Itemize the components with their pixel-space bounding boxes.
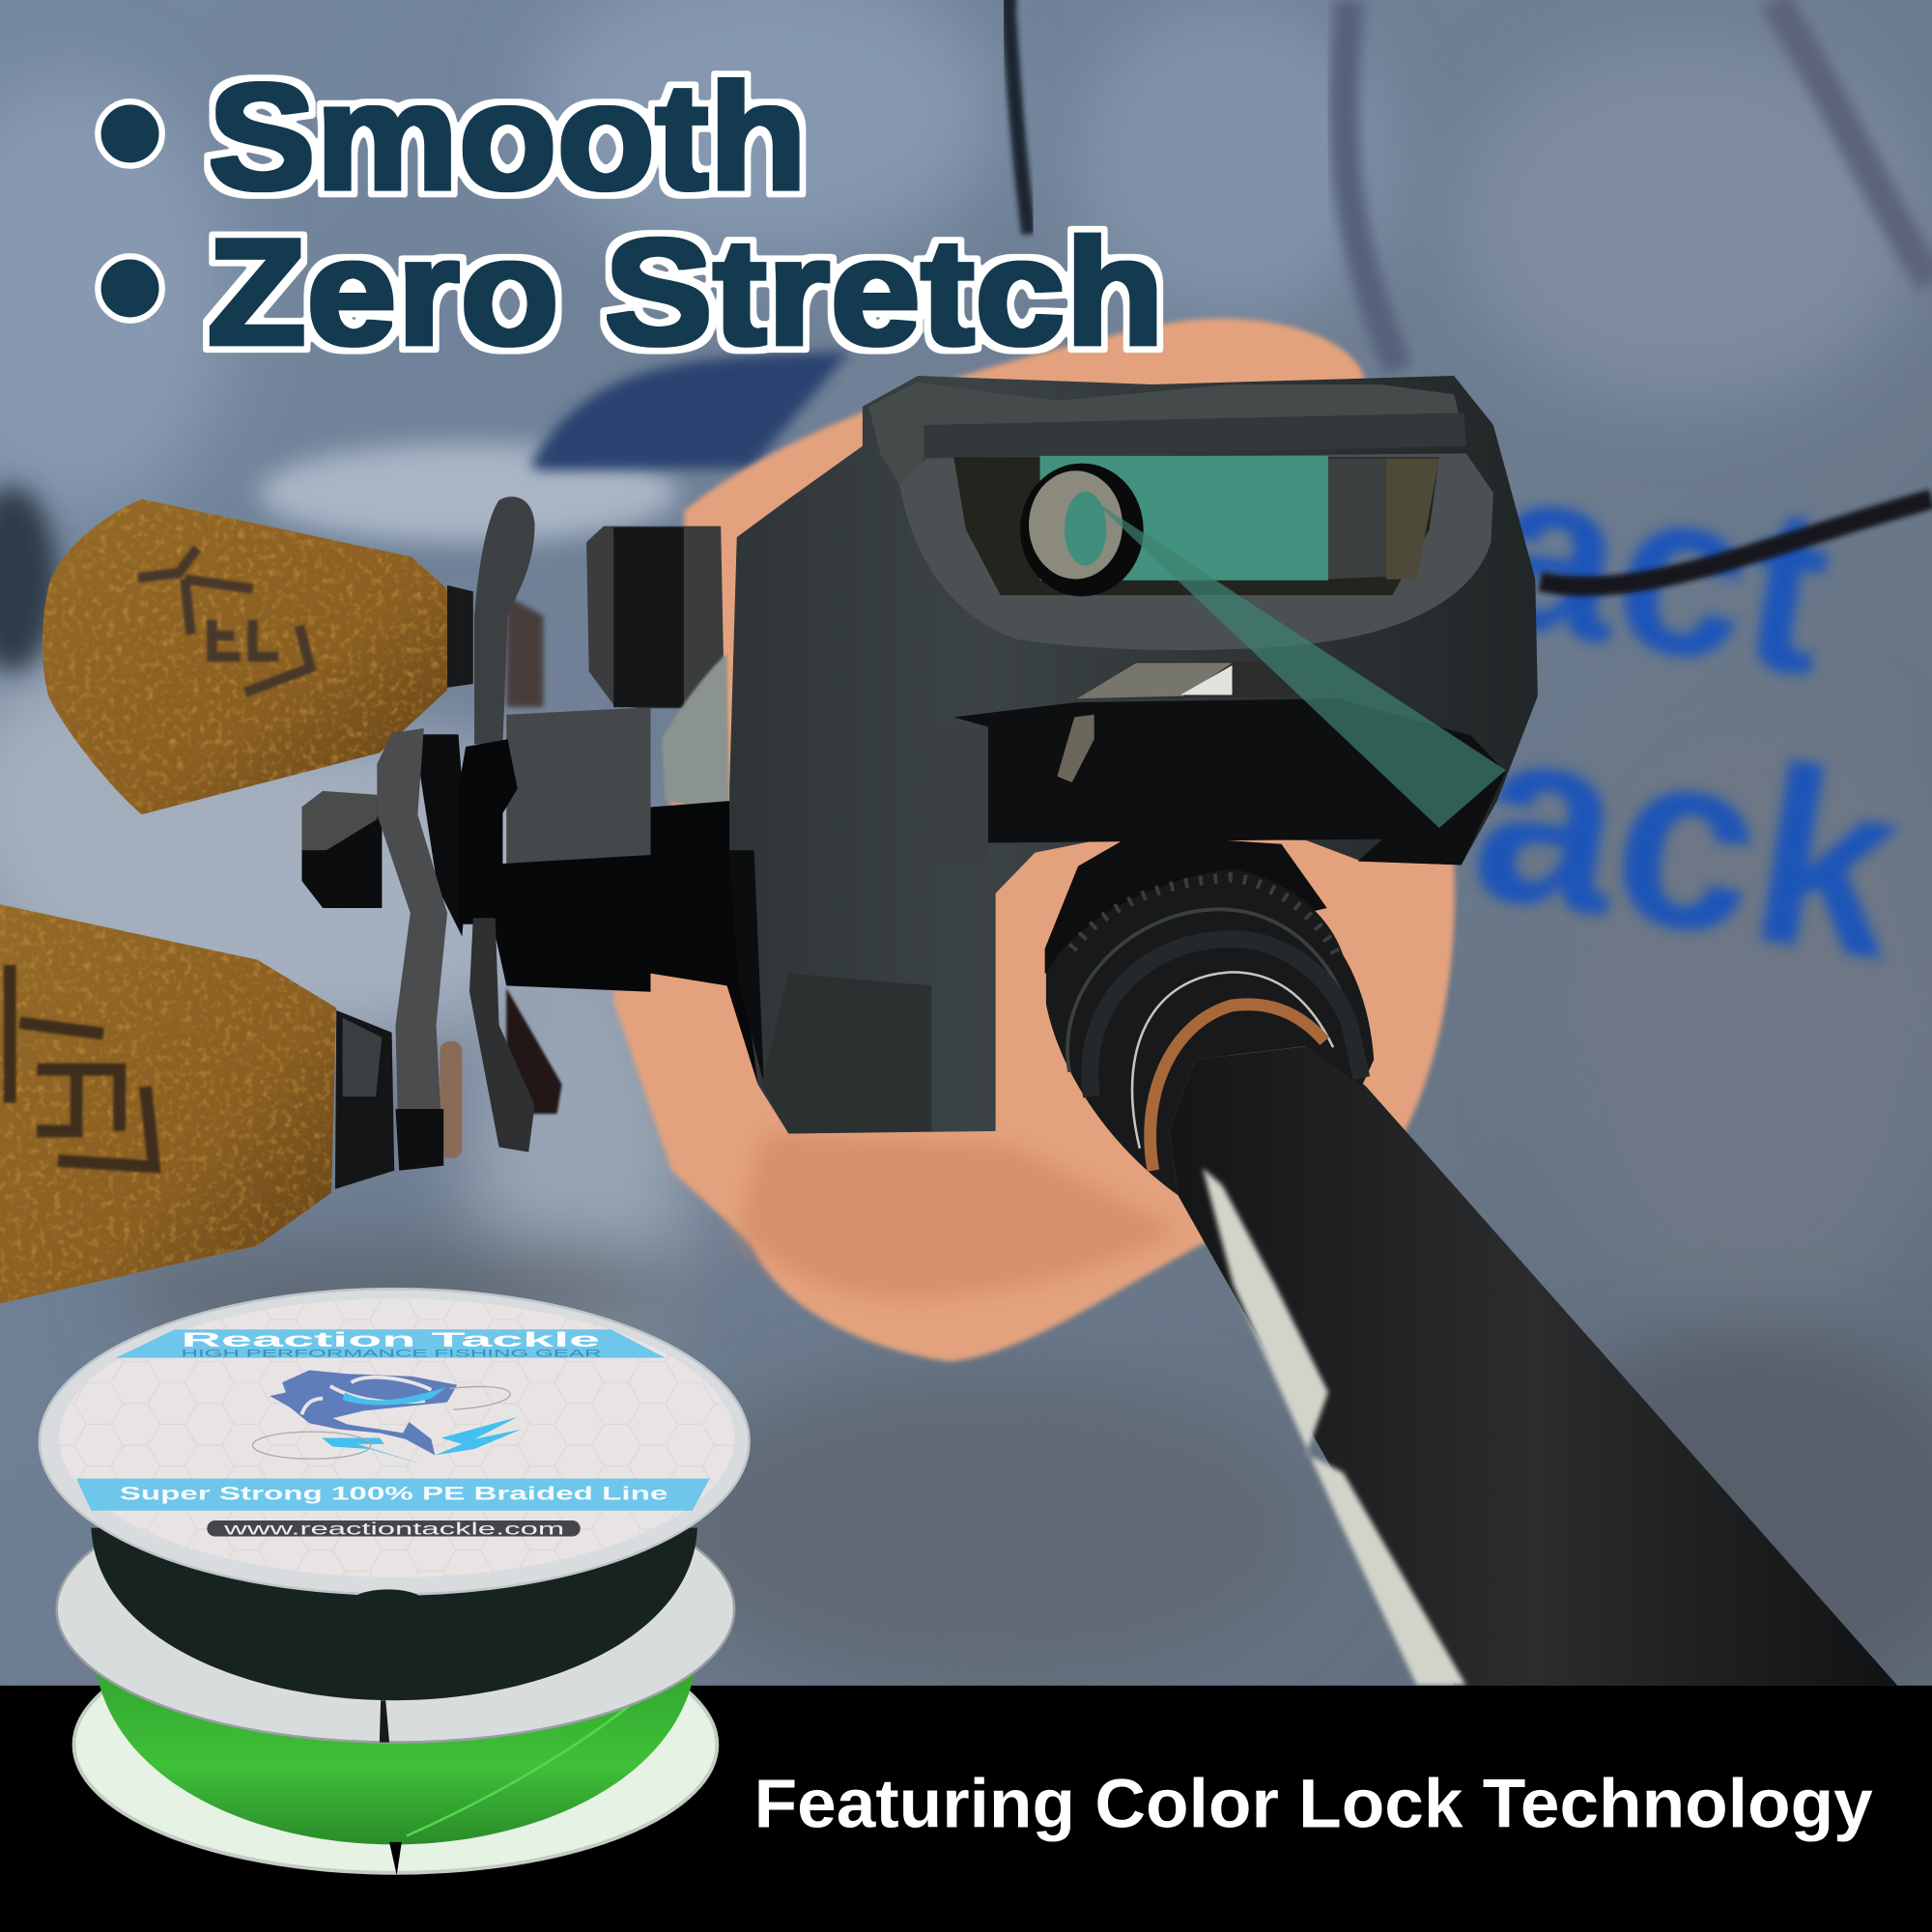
blurred lever behind xyxy=(506,595,543,707)
top spool plate rim xyxy=(40,1289,750,1595)
banner slogan: Super Strong 100% PE Braided Line xyxy=(120,1484,668,1504)
label disc xyxy=(59,1298,734,1577)
top bar xyxy=(868,382,1466,493)
reel body xyxy=(728,376,1538,1133)
fish logo xyxy=(252,1370,522,1465)
caption: Color Lock Technology: Featuring Color Lock Technology xyxy=(754,1766,1873,1843)
braided line running out xyxy=(1092,499,1506,828)
silver ring xyxy=(1132,972,1333,1149)
reel side knob xyxy=(586,526,724,708)
reel seat and bronze ring xyxy=(1045,835,1374,1195)
reel handle crank xyxy=(301,497,757,1189)
metal latch xyxy=(1077,662,1338,698)
middle spool notch xyxy=(380,1700,389,1743)
black band beside axis xyxy=(728,850,764,1084)
headline bullets xyxy=(98,101,162,321)
upper knob ferrule xyxy=(447,585,473,688)
water splash xyxy=(322,1417,522,1465)
bronze ring xyxy=(1151,1005,1324,1171)
website pill: www.reactiontackle.com xyxy=(222,1520,564,1539)
crank arm xyxy=(377,728,447,1171)
bottom black band xyxy=(0,1686,1932,1932)
lower banner xyxy=(76,1479,710,1511)
top banner xyxy=(116,1329,666,1358)
middle spool plate xyxy=(57,1476,734,1743)
black backing xyxy=(414,734,469,936)
top plate notch xyxy=(354,1589,421,1597)
hexagon pattern xyxy=(59,1298,734,1577)
black braided line xyxy=(91,1528,697,1700)
seat threaded ring xyxy=(1090,939,1361,1096)
seat ridges xyxy=(1072,877,1337,955)
lower spool plate xyxy=(74,1616,717,1873)
reel axis xyxy=(506,707,650,867)
brand name: Reaction Tackle xyxy=(182,1327,600,1351)
lower spool notch xyxy=(389,1842,402,1875)
headline: Zero Stretch: Zero Stretch xyxy=(207,208,1164,376)
lower knob ferrule xyxy=(335,1010,394,1189)
rod graphics: white lettering band xyxy=(1203,1168,1466,1686)
window frame xyxy=(899,453,1493,650)
lower lever xyxy=(469,918,535,1152)
hoodie print: blue lettering xyxy=(1458,414,1919,1013)
hoodie cord xyxy=(1540,499,1932,586)
hoodie print: blue lettering: act xyxy=(1470,414,1846,724)
seat inner ring xyxy=(1067,909,1355,1072)
fish markings xyxy=(301,1378,431,1414)
fishing rod xyxy=(1169,1046,1897,1686)
spools of braided line xyxy=(40,1289,750,1875)
cross piece xyxy=(458,739,518,924)
headline: Smooth: Smooth xyxy=(209,52,807,220)
hoodie print: blue lettering: ack xyxy=(1458,668,1919,1013)
fish body xyxy=(270,1370,457,1455)
line guide eye xyxy=(1020,464,1144,596)
brand tagline: HIGH PERFORMANCE FISHING GEAR xyxy=(182,1348,601,1359)
lower black mechanism xyxy=(953,698,1506,865)
window opening xyxy=(953,457,1439,595)
side panel xyxy=(931,727,988,863)
cork handle knob: lower xyxy=(0,904,336,1303)
lower dark side xyxy=(761,974,931,1133)
upper lever xyxy=(474,497,535,744)
copper bolt xyxy=(440,1041,462,1158)
website pill xyxy=(207,1520,581,1539)
cork handle knob: upper xyxy=(43,499,447,814)
screw lever xyxy=(1057,715,1094,782)
hand shading xyxy=(739,1133,1182,1297)
swirl ovals xyxy=(252,1432,371,1459)
handle bolt xyxy=(301,791,382,908)
hand gripping the reel xyxy=(612,319,1455,1361)
green braided line xyxy=(94,1645,697,1844)
spool of teal line xyxy=(1040,456,1328,581)
worn paint chips xyxy=(662,653,729,813)
